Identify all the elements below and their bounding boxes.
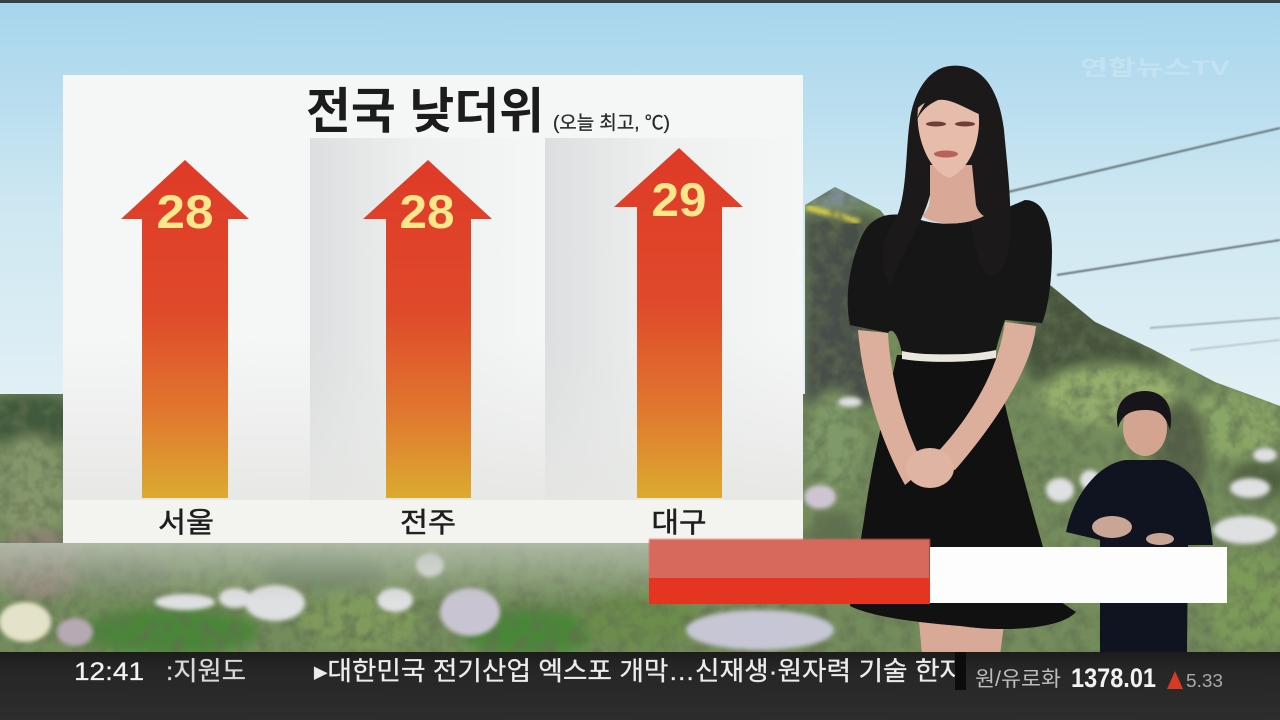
caption white box (930, 547, 1227, 603)
arrow: Jeonju 28: 28 (400, 185, 454, 238)
change value: 5.33 (1186, 671, 1223, 691)
dress bodice and sleeves (848, 200, 1052, 354)
red caption banner (649, 539, 1227, 604)
interpreter body (1066, 460, 1213, 652)
city label: Jeonju: 전주 (400, 507, 456, 538)
clock: 12:41 (74, 658, 144, 686)
title: 전국 낮더위 (306, 85, 544, 139)
mountain and spring forest (0, 180, 1280, 660)
scrolling headline fragment: :지원도 (166, 656, 246, 686)
arrow: Daegu 29 (614, 148, 743, 498)
arrow: Jeonju 28 (363, 160, 492, 498)
legs (918, 610, 1006, 655)
hands (906, 448, 954, 488)
label strip (63, 500, 803, 543)
arrow: Daegu 29: 29 (652, 173, 706, 226)
facial features (926, 122, 975, 158)
ticker background (0, 652, 1280, 720)
interpreter hair (1117, 391, 1171, 430)
exchange label: 원/유로화 (975, 668, 1061, 691)
panel background (63, 75, 803, 543)
caption upper band (649, 539, 930, 579)
subtitle: today's high, Celsius: (오늘 최고, ℃) (553, 112, 670, 134)
arrow: Seoul 28: 28 (156, 185, 214, 238)
right arm (930, 322, 1036, 470)
presenter (848, 66, 1076, 655)
caption lower band (649, 578, 930, 604)
left arm (858, 330, 925, 485)
news ticker bar (0, 652, 1280, 720)
face (918, 97, 979, 178)
dress skirt (850, 355, 1076, 629)
ticker divider (955, 652, 966, 690)
hair mass (883, 66, 1010, 285)
sign language interpreter (1066, 391, 1213, 652)
up arrow (1167, 671, 1183, 689)
arrow: Seoul 28 (121, 160, 249, 498)
neck (922, 165, 984, 224)
interpreter head (1123, 400, 1167, 456)
interpreter hands (1092, 516, 1174, 545)
city label: Daegu: 대구 (652, 507, 706, 538)
column shading (63, 138, 803, 500)
power lines (1008, 128, 1280, 350)
top edge (0, 0, 1280, 3)
sky background (0, 0, 1280, 430)
hair fringe (916, 82, 981, 122)
headline: ▸대한민국 전기산업 엑스포 개막…신재생·원자력 기술 한자 (314, 656, 964, 686)
exchange value: 1378.01 (1071, 663, 1156, 693)
belt (902, 350, 996, 362)
panel: nationwide daytime heat (63, 75, 803, 543)
city label: Seoul: 서울 (158, 507, 214, 538)
broadcaster watermark: 연합뉴스TV (1080, 57, 1230, 80)
